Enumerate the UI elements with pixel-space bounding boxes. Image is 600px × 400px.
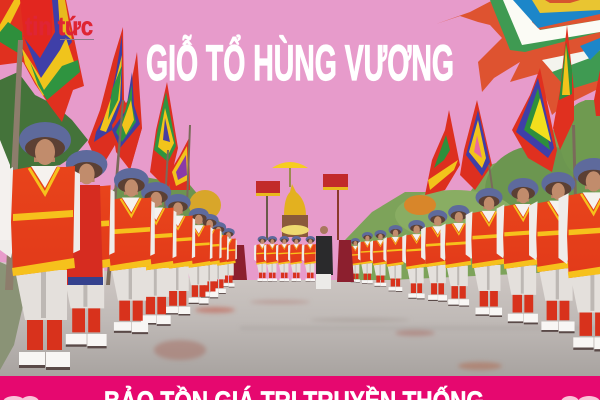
road	[0, 262, 600, 376]
flag group: mid left	[88, 27, 190, 190]
flag poles: mid left	[106, 100, 191, 285]
decorative cloud left	[3, 396, 39, 400]
banners	[256, 174, 348, 240]
altar: statue and umbrella	[272, 162, 309, 237]
bottom banner	[0, 376, 600, 400]
flag group: right	[425, 25, 600, 200]
woman in red robe right	[337, 240, 354, 282]
soldiers: left line	[0, 122, 237, 370]
flag pole: left	[5, 40, 23, 290]
master of ceremonies	[316, 226, 333, 289]
flag: large top right	[436, 0, 600, 115]
decorative cloud right	[561, 396, 600, 400]
soldier at far left	[0, 140, 10, 240]
background trees	[0, 72, 600, 290]
soldiers: right line	[358, 158, 600, 351]
flag: large left	[0, 0, 84, 122]
logo: tin tức	[25, 11, 93, 41]
road reflections	[154, 300, 600, 370]
woman in red robe left	[230, 245, 247, 280]
ceremonial line: centre	[254, 236, 362, 283]
grass edge	[0, 262, 30, 370]
